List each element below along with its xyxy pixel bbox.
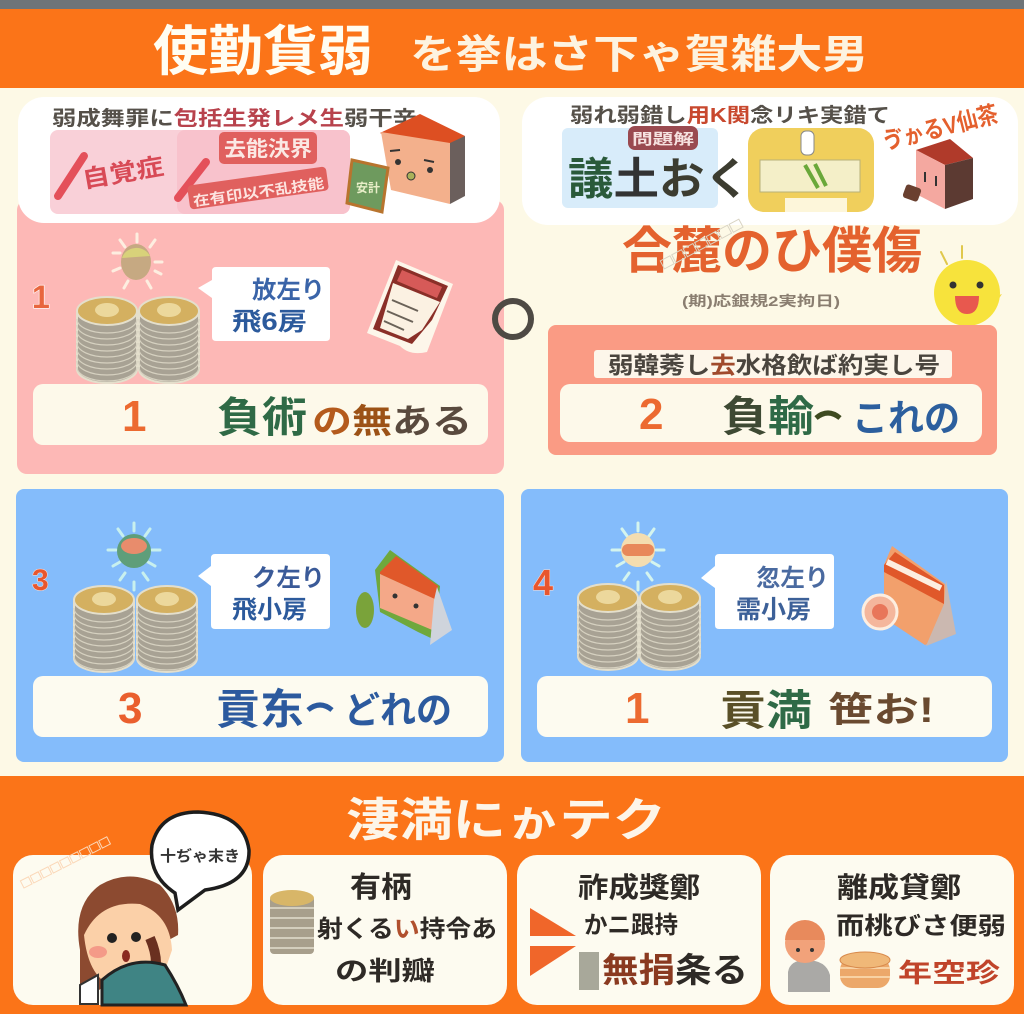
- panel 2 heading: 合麓のひ僕傷: [622, 223, 922, 279]
- panel 1: pink: [17, 97, 504, 474]
- footer heading: 淒満にゕテク: [346, 794, 666, 846]
- icon: elder: [785, 920, 830, 992]
- person: [78, 876, 186, 1005]
- icon: coin pile: [840, 952, 890, 988]
- speech bubble 3: [198, 554, 330, 629]
- footer card 4: 而桃びさ便弱: [836, 913, 1006, 940]
- footer card 3: 祚成獎鄭: [578, 872, 700, 903]
- icon: coin stacks: [77, 297, 199, 383]
- panel 2: salmon box: [548, 325, 997, 455]
- label bar 1: の無ある: [312, 403, 472, 441]
- icon: house character with book: 安計: [356, 180, 380, 195]
- thought bubble: [151, 812, 249, 910]
- label bar 2: [560, 384, 982, 442]
- connector ring: [495, 301, 531, 337]
- icon: coin stacks: [578, 584, 700, 670]
- footer card 1: worried person: [13, 812, 252, 1005]
- footer band: [0, 776, 1024, 1014]
- title banner: を挙はさ下ゃ賀雑大男: [410, 33, 868, 77]
- icon: red house: [902, 139, 973, 209]
- label bar 2: これの: [852, 398, 960, 439]
- speech bubble 3: 飛小房: [232, 596, 307, 624]
- speech bubble 4: 忽左り: [756, 565, 829, 592]
- label bar 1: 負術: [217, 394, 307, 441]
- icon: orange house character: [863, 546, 956, 646]
- top grey strip: [0, 0, 1024, 9]
- intro card 1: 自覚症: [80, 153, 166, 194]
- label bar 3: どれの: [344, 690, 452, 731]
- watermark boxes lower: [20, 837, 110, 888]
- label bar 3: [33, 676, 488, 737]
- label bar 3: 貢东: [216, 686, 304, 733]
- icon: coin stack: [270, 890, 314, 954]
- thought bubble: 十ぢゃ末き: [160, 847, 240, 865]
- speech bubble 3: ク左り: [252, 565, 325, 592]
- footer card 3: 無捐条る: [602, 952, 748, 990]
- intro card 1: 在有印以不乱技能: [192, 175, 325, 209]
- red handwritten marks: ゔゕるV仙茶: [880, 101, 1001, 156]
- speech bubble 4: 需小房: [736, 596, 811, 624]
- footer card 3: かニ跟持: [584, 912, 678, 939]
- speech bubble 4: [701, 554, 834, 629]
- label bar 2: 負輸: [722, 393, 814, 440]
- footer card 3: [517, 855, 761, 1005]
- panel 3: blue: [16, 489, 504, 762]
- number 4 side label: 4: [533, 562, 553, 603]
- title banner: 使勤貨弱: [153, 22, 373, 82]
- label bar 3: 3: [118, 684, 142, 733]
- icon: orange arrows: [530, 908, 576, 976]
- footer card 4: [770, 855, 1014, 1005]
- speech bubble 1: [198, 267, 330, 341]
- intro card 1: 弱成舞罪に 包括生発レメ生 弱干辛: [52, 106, 417, 130]
- panel 2: intro card: 議土おく: [568, 155, 750, 204]
- panel 2: intro card: 弱れ弱錯し 用K関 念リキ実錯て: [570, 104, 890, 127]
- label bar 1: [33, 384, 488, 445]
- icon: light bulb: [113, 234, 162, 288]
- label bar 4: 1: [625, 684, 649, 733]
- speech bubble 1: 飛6房: [232, 308, 307, 336]
- footer card 2: 有柄: [350, 871, 412, 904]
- icon: sun: [612, 523, 664, 590]
- footer card 2: 射くるい持令あ: [317, 916, 497, 943]
- label bar 1: 1: [122, 392, 146, 441]
- number 3 side label: 3: [32, 564, 49, 597]
- watermark boxes upper: [660, 219, 743, 269]
- intro card 1: [18, 97, 500, 223]
- icon: green house character: [356, 550, 452, 645]
- panel 4: blue: [521, 489, 1008, 762]
- label bar 2: 2: [639, 390, 663, 439]
- footer card 4: 年空珍: [898, 958, 1000, 988]
- number 1 side label: 1: [32, 279, 50, 315]
- icon: yellow chick: [934, 246, 1002, 326]
- icon: coin stacks: [74, 586, 197, 672]
- intro card 1: 去能決界: [224, 138, 312, 161]
- panel 2: intro card: 問題解: [632, 131, 694, 148]
- footer card 2: [263, 855, 507, 1005]
- caption strip: 弱韓莠し 去水格飲ば約実し号: [608, 352, 940, 378]
- icon: sun: [108, 523, 160, 590]
- label bar 4: [537, 676, 992, 737]
- footer card 2: の判瓣: [335, 956, 435, 986]
- title banner: [0, 9, 1024, 88]
- footer card 4: 離成貸鄭: [837, 872, 961, 903]
- icon: document: [367, 260, 453, 353]
- icon: house character with book: [347, 114, 465, 212]
- speech bubble 1: 放左り: [252, 277, 325, 304]
- label bar 4: 貢満: [720, 687, 812, 734]
- panel 2: intro card: [522, 97, 1018, 225]
- panel 2 subcaption: (期)応銀規2実拘日): [682, 293, 840, 309]
- label bar 4: 笹お!: [828, 691, 934, 730]
